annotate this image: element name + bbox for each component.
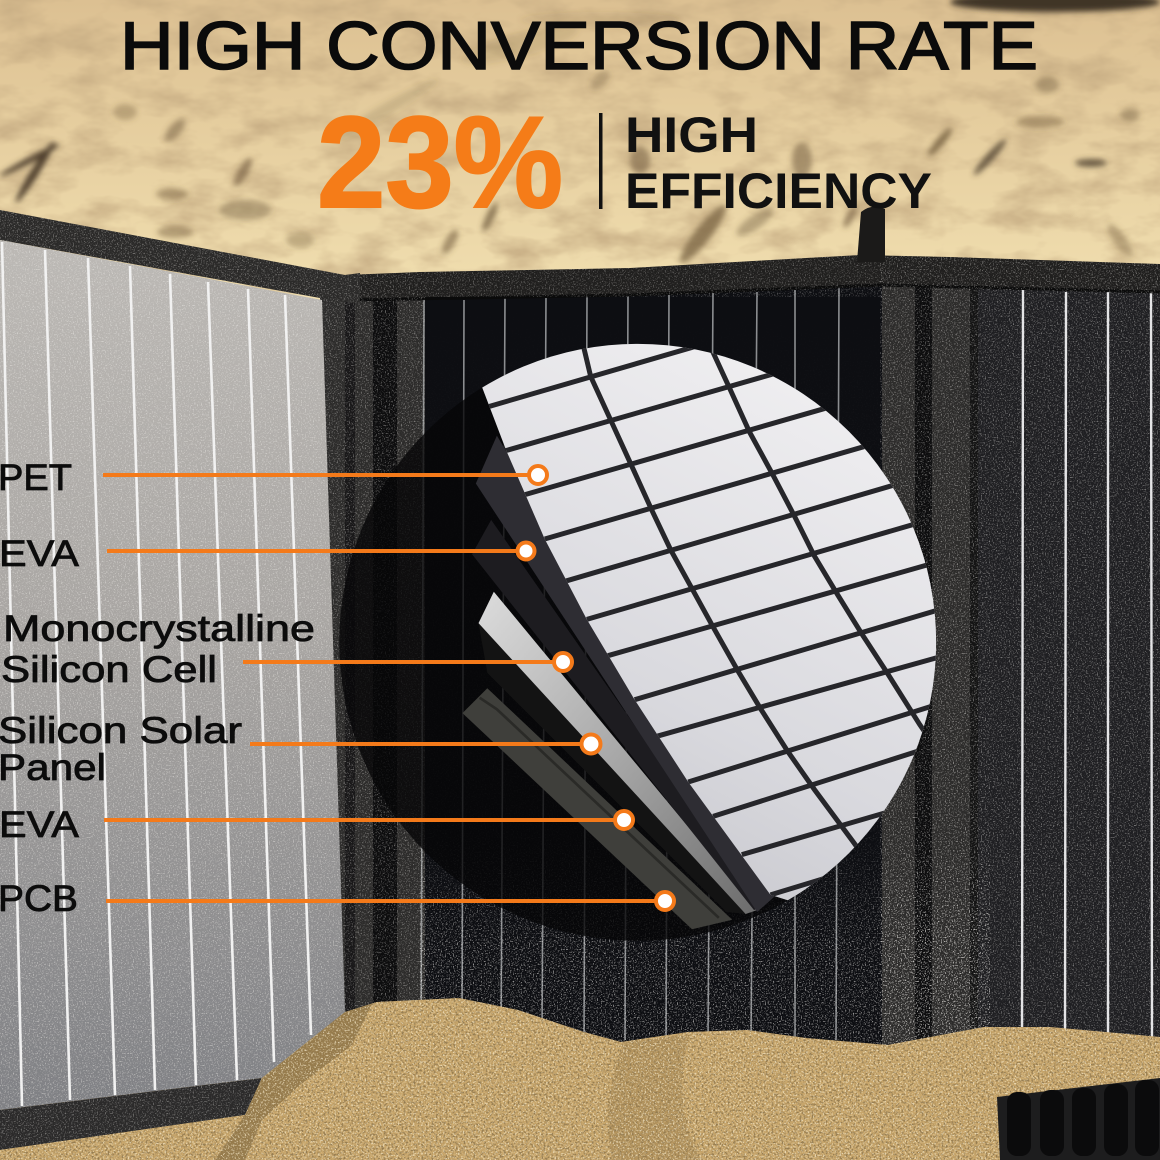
layer: EVA (472, 520, 761, 910)
label: Silicon Solar Panel: Panel (0, 747, 106, 788)
right solar cells (978, 288, 1160, 1050)
label: Silicon Solar Panel: Silicon Solar (0, 710, 242, 751)
icon: connector cables (997, 1078, 1160, 1160)
panel: right fabric body (320, 250, 1160, 1070)
label: Monocrystalline Silicon Cell: Silicon Cell (1, 649, 217, 690)
white bus lines (2, 242, 311, 1106)
bright cell disc (482, 344, 936, 900)
layer: black backing (479, 623, 748, 914)
cell grid lines (421, 288, 839, 1040)
sand mound foreground (0, 990, 1160, 1160)
text: high efficiency: EFFICIENCY (625, 163, 932, 219)
sand background (0, 0, 1160, 300)
dark circle backdrop (339, 344, 936, 941)
cell grid (488, 348, 936, 896)
fabric folds (345, 255, 978, 1050)
center solar cells (425, 285, 882, 1050)
label: EVA top: EVA (0, 533, 79, 574)
label: EVA bottom: EVA (0, 804, 79, 845)
label: Monocrystalline Silicon Cell (1, 608, 315, 690)
layer: PCB (462, 688, 732, 929)
top fabric band (320, 255, 1160, 300)
layer: silicon cell gray (479, 592, 757, 914)
text: high efficiency: HIGH (625, 107, 758, 163)
title: HIGH CONVERSION RATE (120, 8, 1038, 84)
layer: PET edge (476, 436, 774, 912)
separator (599, 113, 602, 209)
top fabric band (0, 210, 360, 304)
text: high efficiency (625, 107, 932, 219)
label: Silicon Solar Panel (0, 710, 242, 788)
layer cutaway circle (339, 344, 936, 941)
label: Monocrystalline Silicon Cell: Monocrystalline (3, 608, 315, 649)
cell surface (0, 240, 345, 1110)
label: PCB: PCB (0, 878, 78, 919)
bottom fabric band (0, 1078, 262, 1150)
strap loop (857, 207, 885, 262)
stat: 23%: 23% (317, 89, 563, 235)
label: PET: PET (0, 457, 72, 498)
callout lines and markers (103, 466, 674, 910)
panel: left reflective solar panel (0, 205, 360, 1153)
